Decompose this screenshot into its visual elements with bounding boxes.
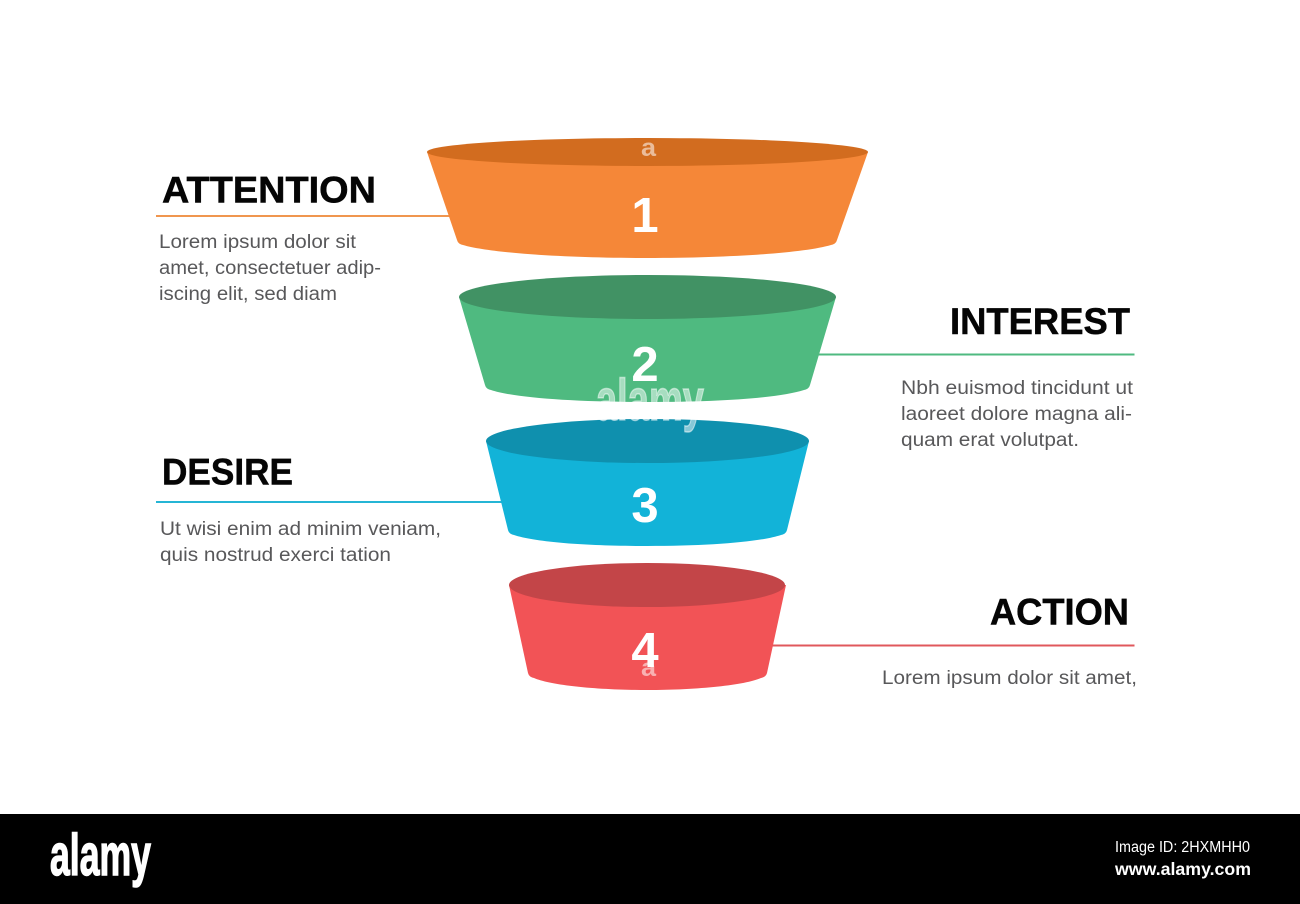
image id: Image ID: 2HXMHH0 (1115, 839, 1250, 856)
funnel segment 4: red: 4 (631, 624, 659, 678)
text block: action (882, 592, 1137, 689)
text block: attention (159, 170, 381, 305)
body: attention: amet, consectetuer adip- (159, 258, 381, 279)
footer logo: alamy (50, 823, 151, 888)
heading: action: ACTION (990, 592, 1129, 632)
body: attention: iscing elit, sed diam (159, 284, 337, 305)
body: attention (159, 232, 381, 305)
funnel segment 1: orange (427, 138, 868, 258)
funnel segment 4: red (509, 563, 786, 690)
funnel segment 3: blue (486, 419, 809, 546)
text block: interest (901, 301, 1134, 451)
funnel segment 3: blue: 3 (631, 479, 659, 533)
funnel segment 2: green: 2 (631, 338, 659, 392)
heading: attention: ATTENTION (162, 170, 376, 210)
body: interest: laoreet dolore magna ali- (901, 404, 1132, 425)
body: interest: Nbh euismod tincidunt ut (901, 378, 1134, 399)
body: desire: Ut wisi enim ad minim veniam, (160, 519, 441, 540)
watermark fragments: a (641, 134, 657, 162)
funnel segment 1: orange: 1 (631, 189, 659, 243)
heading: interest: INTEREST (950, 301, 1130, 342)
connector line: interest (815, 354, 1134, 356)
heading: desire: DESIRE (162, 452, 293, 492)
connector line: attention (156, 215, 452, 217)
footer bar (0, 814, 1300, 904)
connector line: action (770, 644, 1134, 646)
body: interest: quam erat volutpat. (901, 430, 1079, 451)
watermark fragments: a (641, 654, 657, 682)
body: desire (160, 519, 441, 566)
funnel segment 2: green (459, 275, 836, 402)
website: www.alamy.com (1114, 859, 1251, 879)
body: action: Lorem ipsum dolor sit amet, (882, 668, 1137, 689)
watermark fragments (596, 134, 704, 682)
body: desire: quis nostrud exerci tation (160, 545, 391, 566)
text block: desire (160, 452, 441, 566)
watermark fragments: alamy (596, 368, 704, 433)
body: attention: Lorem ipsum dolor sit (159, 232, 357, 253)
body: interest (901, 378, 1134, 451)
connector line: desire (156, 501, 506, 503)
